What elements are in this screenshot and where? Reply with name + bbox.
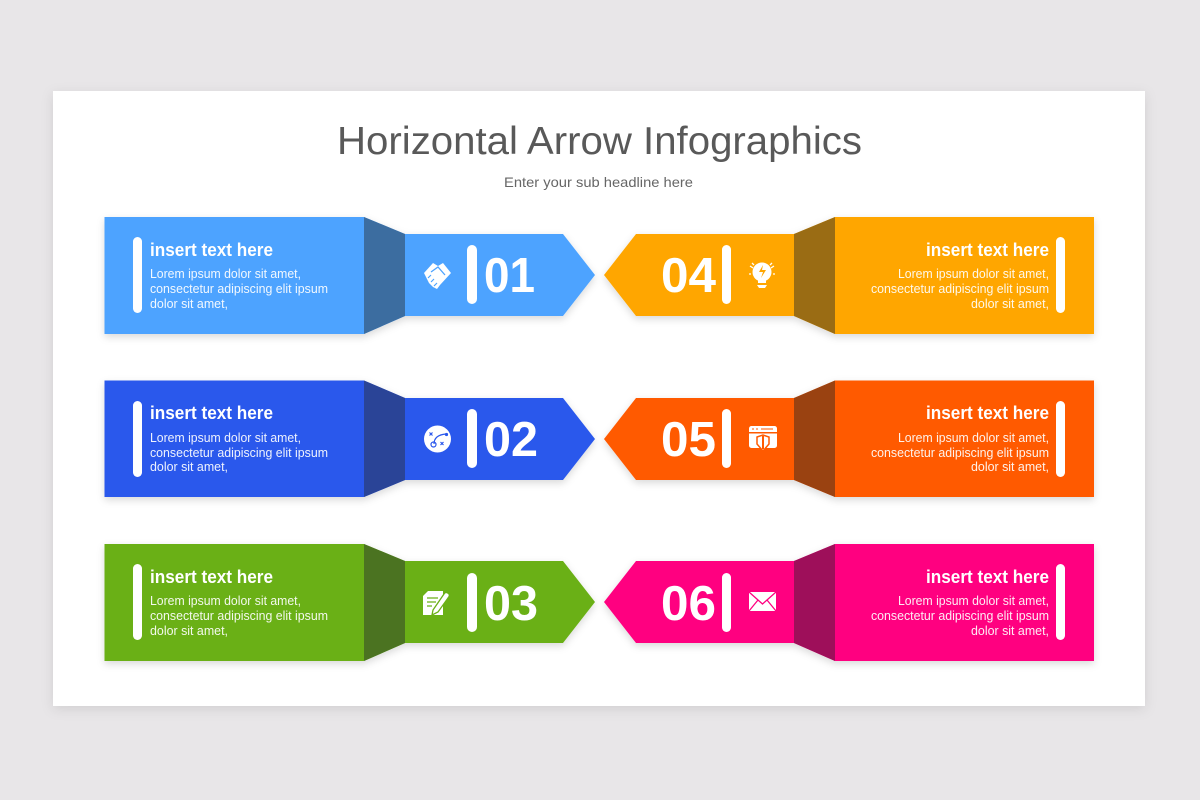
body text 05: Lorem ipsum dolor sit amet, bbox=[898, 430, 1049, 445]
arrow shape 01 bbox=[104, 217, 595, 334]
heading 05: insert text here bbox=[926, 403, 1049, 423]
number bar 05 bbox=[722, 409, 731, 468]
body text 03: consectetur adipiscing elit ipsum bbox=[150, 608, 328, 623]
arrow shape 03 bbox=[104, 544, 595, 661]
arrow shape 06 bbox=[604, 544, 1094, 661]
body text 02: dolor sit amet, bbox=[150, 459, 228, 474]
number 02: 02 bbox=[484, 413, 538, 467]
text bar 01 bbox=[133, 237, 142, 313]
heading 03: insert text here bbox=[150, 567, 273, 587]
number 01: 01 bbox=[484, 249, 535, 303]
body text 06: Lorem ipsum dolor sit amet, bbox=[898, 593, 1049, 608]
text bar 04 bbox=[1056, 237, 1065, 313]
body text 02 bbox=[150, 430, 328, 474]
number bar 06 bbox=[722, 573, 731, 632]
panel: step 03 bbox=[104, 544, 595, 661]
body text 05 bbox=[871, 430, 1049, 474]
body text 04: Lorem ipsum dolor sit amet, bbox=[898, 266, 1049, 281]
body text 04 bbox=[871, 266, 1049, 311]
icon: handshake bbox=[424, 263, 451, 289]
heading 01: insert text here bbox=[150, 240, 273, 260]
panel: step 06 bbox=[604, 544, 1094, 661]
panel: step 04 bbox=[604, 217, 1094, 334]
number bar 04 bbox=[722, 245, 731, 304]
number bar 01 bbox=[467, 245, 477, 304]
heading 04: insert text here bbox=[926, 240, 1049, 260]
body text 05: dolor sit amet, bbox=[971, 459, 1049, 474]
body text 04: dolor sit amet, bbox=[971, 296, 1049, 311]
subtitle: Enter your sub headline here bbox=[504, 174, 693, 190]
arrow shape 04 bbox=[604, 217, 1094, 334]
text bar 02 bbox=[133, 401, 142, 477]
fold 04 bbox=[794, 217, 835, 334]
body text 06 bbox=[871, 593, 1049, 638]
arrow shape 02 bbox=[104, 380, 595, 497]
fold 01 bbox=[364, 217, 405, 334]
body text 03 bbox=[150, 593, 328, 638]
panel: step 01 bbox=[104, 217, 595, 334]
body text 02: consectetur adipiscing elit ipsum bbox=[150, 445, 328, 460]
icon: light bulb bbox=[749, 262, 775, 288]
number 06: 06 bbox=[661, 577, 716, 631]
icon: envelope bbox=[749, 592, 776, 611]
icon: browser with shield bbox=[749, 426, 777, 451]
number 05: 05 bbox=[661, 413, 716, 467]
body text 04: consectetur adipiscing elit ipsum bbox=[871, 281, 1049, 296]
fold 06 bbox=[794, 544, 835, 661]
arrow shape 05 bbox=[604, 380, 1094, 497]
panel: step 02 bbox=[104, 380, 595, 497]
text bar 03 bbox=[133, 564, 142, 640]
number 04: 04 bbox=[661, 249, 716, 303]
text bar 05 bbox=[1056, 401, 1065, 477]
body text 01: Lorem ipsum dolor sit amet, bbox=[150, 266, 301, 281]
title: Horizontal Arrow Infographics bbox=[337, 120, 862, 163]
body text 06: consectetur adipiscing elit ipsum bbox=[871, 608, 1049, 623]
fold 05 bbox=[794, 380, 835, 497]
icon: strategy circle bbox=[424, 426, 451, 452]
body text 02: Lorem ipsum dolor sit amet, bbox=[150, 430, 301, 445]
fold 03 bbox=[364, 544, 405, 661]
body text 03: dolor sit amet, bbox=[150, 623, 228, 638]
panel: step 05 bbox=[604, 380, 1094, 497]
body text 01 bbox=[150, 266, 328, 311]
body text 05: consectetur adipiscing elit ipsum bbox=[871, 445, 1049, 460]
fold 02 bbox=[364, 380, 405, 497]
number bar 03 bbox=[467, 573, 477, 632]
panel: white card bbox=[53, 91, 1145, 706]
icon: document and pencil bbox=[423, 591, 449, 615]
text bar 06 bbox=[1056, 564, 1065, 640]
heading 02: insert text here bbox=[150, 403, 273, 423]
body text 03: Lorem ipsum dolor sit amet, bbox=[150, 593, 301, 608]
body text 01: consectetur adipiscing elit ipsum bbox=[150, 281, 328, 296]
body text 01: dolor sit amet, bbox=[150, 296, 228, 311]
body text 06: dolor sit amet, bbox=[971, 623, 1049, 638]
number bar 02 bbox=[467, 409, 477, 468]
number 03: 03 bbox=[484, 577, 538, 631]
heading 06: insert text here bbox=[926, 567, 1049, 587]
